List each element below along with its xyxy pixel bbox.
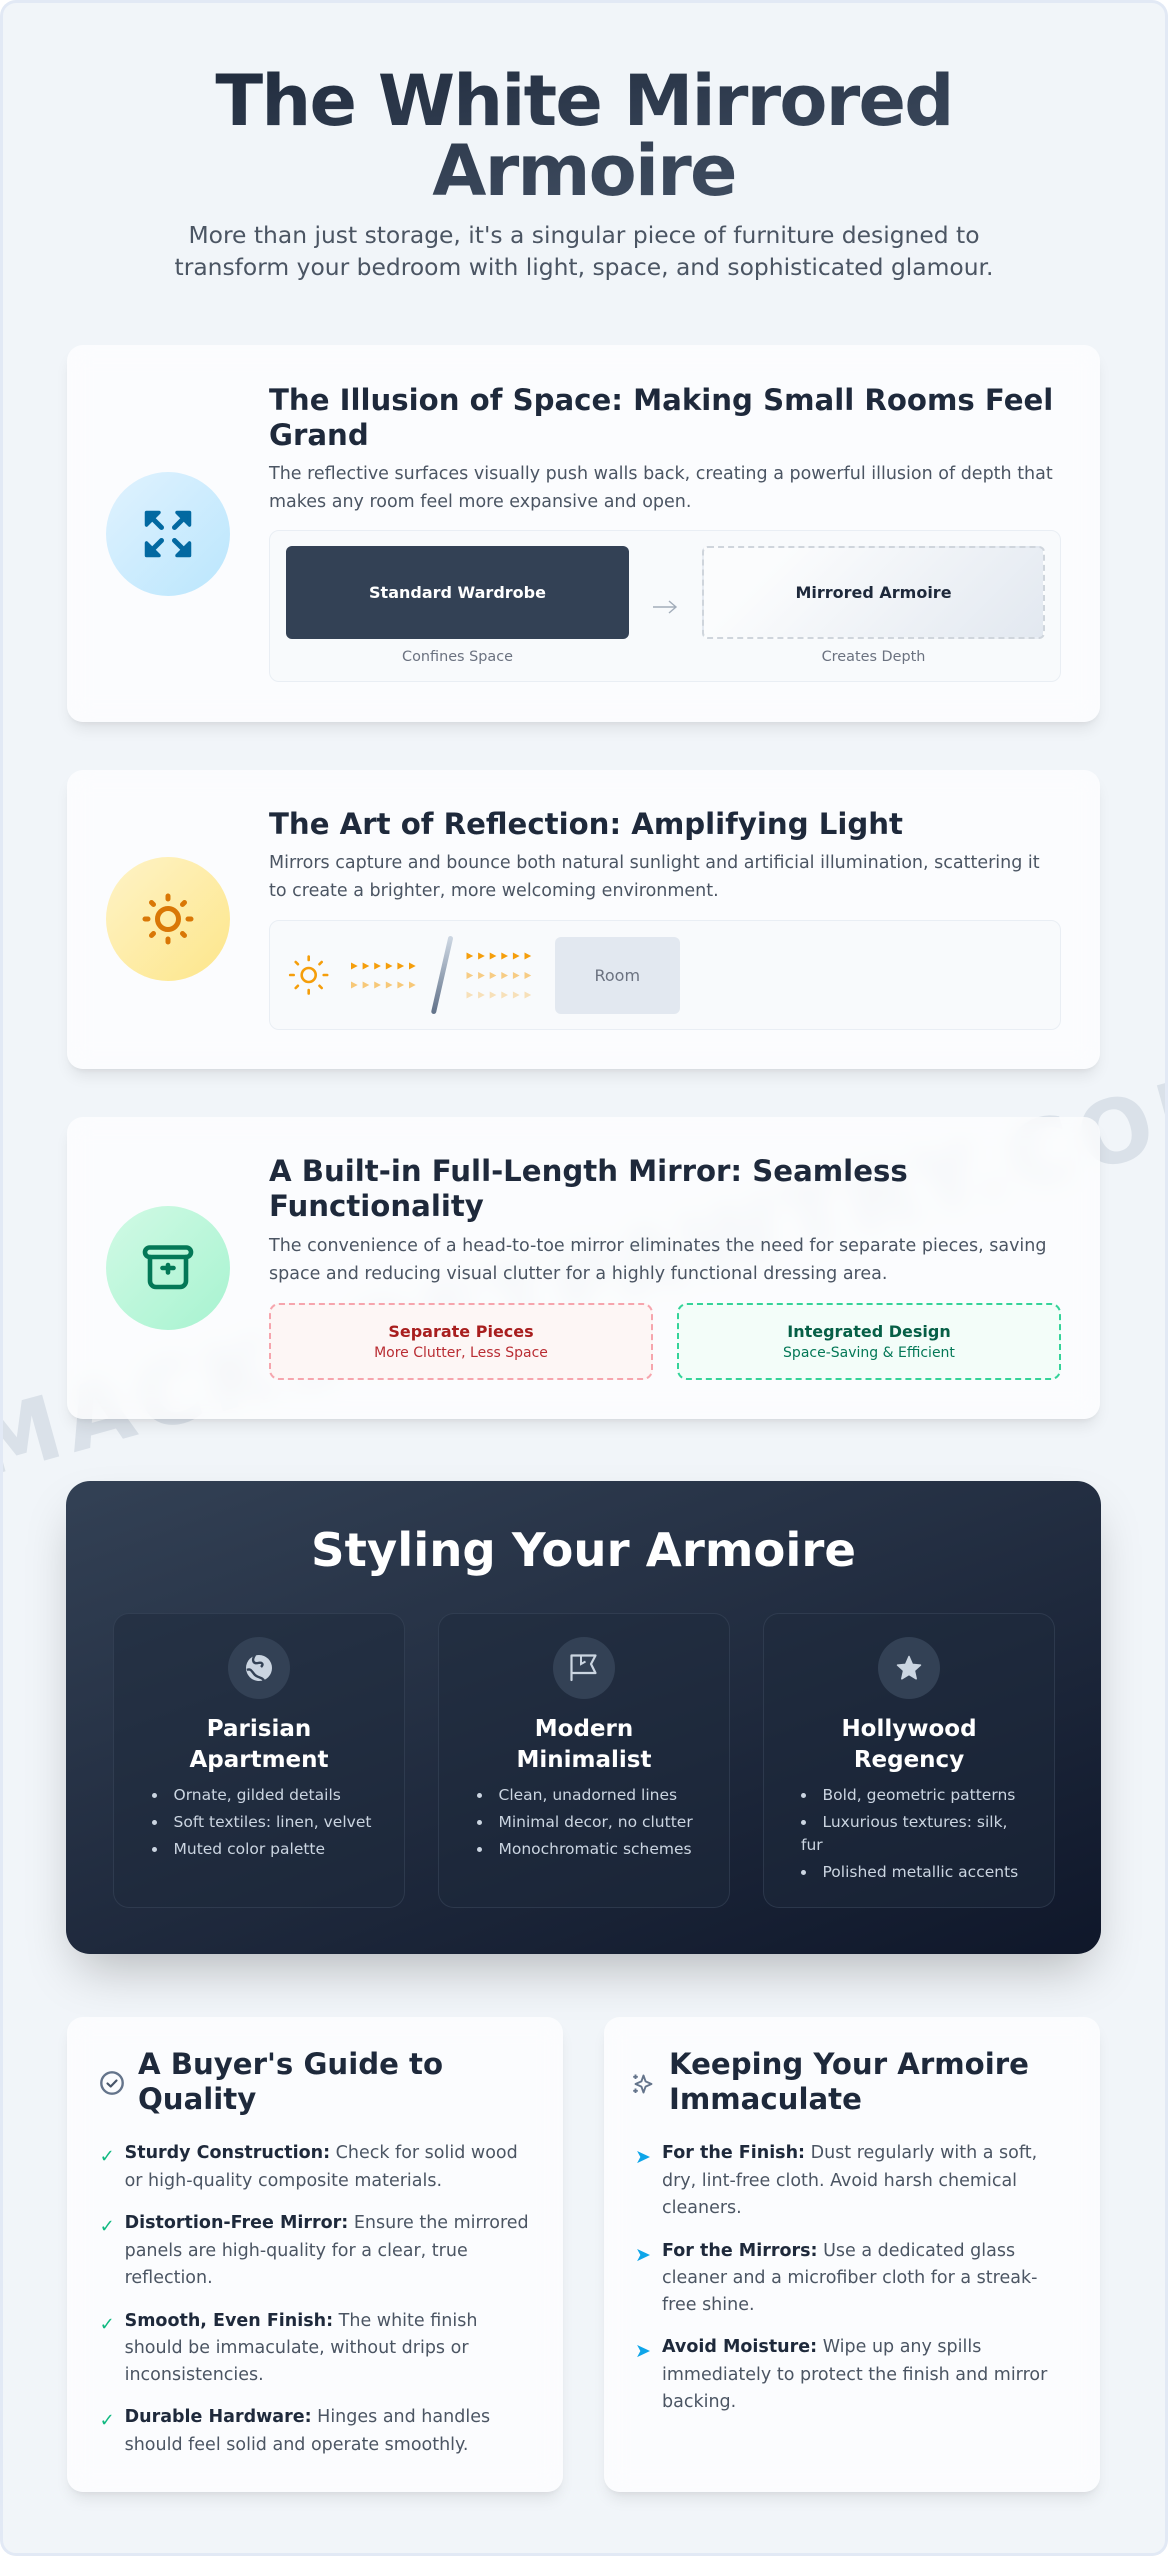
item: smooth finish [100,2311,477,2385]
heading: Functionality [269,1189,484,1223]
subtitle: More than just storage, it's a singular piece of furniture designed to [188,221,980,249]
description [268,464,1053,512]
icon: sun [106,857,230,981]
icon: flag [553,1637,615,1699]
heading [669,2047,1029,2116]
style name: Minimalist [517,1747,651,1773]
style name: Regency [854,1747,964,1773]
panel: art of reflection [67,770,1100,1069]
item: the mirrors [635,2241,1037,2315]
panel: keeping immaculate [604,2017,1100,2492]
item: distortion-free mirror: reflection. [125,2268,213,2288]
panel: styling your armoire [66,1481,1101,1954]
panel: keeping immaculate: ➤ [635,2340,651,2362]
style card: hollywood regency [763,1613,1055,1908]
description: Mirrors capture and bounce both natural sunlight and artificial illumination, scattering it [269,853,1040,873]
item: the finish: For the Finish: Dust regularly with a soft, [662,2143,1037,2163]
style list: Polished metallic accents [822,1863,1018,1881]
item: the finish: dry, lint-free cloth. Avoid harsh chemical [662,2171,1017,2191]
description: space and reducing visual clutter for a highly functional dressing area. [269,1264,887,1284]
light rays and mirror [288,936,532,1014]
item: durable hardware: Durable Hardware: Hinges and handles [125,2407,490,2427]
panel: illusion of space [67,345,1100,722]
heading: The Illusion of Space: Making Small Rooms Feel [269,383,1053,417]
style name: Parisian [207,1716,311,1742]
item: the finish [635,2143,1037,2218]
style name: Hollywood [841,1716,977,1742]
panel: buyer's guide: ✓ [100,2410,115,2431]
heading: Grand [269,418,369,452]
style name [841,1716,977,1773]
item: avoid moisture: Avoid Moisture: Wipe up any spills [662,2337,981,2357]
item: distortion-free mirror: Distortion-Free Mirror: Ensure the mirrored [125,2213,529,2233]
item: the mirrors: For the Mirrors: Use a dedicated glass [662,2241,1015,2261]
item: smooth finish: Smooth, Even Finish: The white finish [125,2311,477,2331]
icon: archive box [106,1206,230,1330]
sublabel: Space-Saving & Efficient [783,1344,955,1360]
item: smooth finish: should be immaculate, without drips or [125,2338,469,2358]
label: creates depth: Creates Depth [822,649,925,665]
style list: Ornate, gilded details [174,1786,341,1804]
description: The reflective surfaces visually push walls back, creating a powerful illusion of depth that [269,464,1053,484]
style list: Luxurious textures: silk, [822,1813,1007,1831]
standard wardrobe block [286,546,629,639]
style list [152,1786,372,1858]
item: the mirrors: cleaner and a microfiber cloth for a streak- [662,2268,1037,2288]
item: the finish: cleaners. [662,2198,742,2218]
panel: buyer's guide [67,2017,563,2492]
style list: Clean, unadorned lines [498,1786,677,1804]
item: avoid moisture: immediately to protect the finish and mirror [662,2365,1047,2385]
icon: globe [228,1637,290,1699]
heading [269,1154,908,1223]
style name: Modern [535,1716,633,1742]
subtitle [175,221,993,280]
title: Armoire [432,130,736,212]
heading [269,383,1053,452]
style name: Apartment [189,1747,329,1773]
item: sturdy construction: or high-quality composite materials. [125,2171,442,2191]
style list [801,1786,1018,1881]
title: The White Mirrored [215,60,953,142]
diagram: wardrobe versus armoire [269,530,1061,682]
icon: sparkles [633,2074,652,2094]
comparison: separate pieces [269,1303,653,1380]
standard wardrobe block: Standard Wardrobe [369,583,546,602]
description: The convenience of a head-to-toe mirror eliminates the need for separate pieces, saving [269,1236,1046,1256]
heading: A Buyer's Guide to [138,2047,443,2081]
diagram: light reflection [269,920,1061,1030]
label: Integrated Design [787,1322,951,1341]
subtitle: transform your bedroom with light, space, and sophisticated glamour. [175,252,993,280]
style name [189,1716,329,1773]
mirrored armoire block [702,546,1045,639]
item: sturdy construction [100,2143,518,2191]
panel: keeping immaculate: ➤ [635,2146,651,2168]
item: the mirrors: free shine. [662,2295,755,2315]
description [268,1236,1046,1284]
heading: Immaculate [669,2082,862,2116]
label: confines space: Confines Space [402,649,513,665]
style card: modern minimalist [438,1613,730,1908]
sublabel: More Clutter, Less Space [374,1344,548,1360]
title [100,66,1068,206]
style name [517,1716,651,1773]
style list: fur [801,1836,823,1854]
style list [477,1786,693,1858]
style list: Bold, geometric patterns [822,1786,1015,1804]
item: distortion-free mirror: panels are high-quality for a clear, true [125,2241,468,2261]
heading: Styling Your Armoire [311,1523,856,1577]
comparison: integrated design [677,1303,1061,1380]
heading: A Built-in Full-Length Mirror: Seamless [269,1154,908,1188]
item: smooth finish: inconsistencies. [125,2365,264,2385]
panel: buyer's guide: ✓ [100,2314,115,2335]
panel: built-in mirror [67,1117,1100,1419]
item: durable hardware [100,2407,490,2455]
description [269,853,1040,901]
icon: check circle [100,2071,124,2095]
mirrored armoire block: Mirrored Armoire [795,583,952,602]
style card: parisian apartment [113,1613,405,1908]
panel: buyer's guide: ✓ [100,2216,115,2237]
item: avoid moisture [635,2337,1048,2412]
style list: Muted color palette [174,1840,325,1858]
heading [138,2047,443,2116]
icon: expand arrows [106,472,230,596]
label: Separate Pieces [388,1322,534,1341]
style list: Minimal decor, no clutter [498,1813,693,1831]
room block [555,936,680,1014]
icon: star [878,1637,940,1699]
panel: buyer's guide: ✓ [100,2146,115,2167]
item: sturdy construction: Sturdy Construction: Check for solid wood [125,2143,518,2163]
item: avoid moisture: backing. [662,2392,736,2412]
item: durable hardware: should feel solid and operate smoothly. [125,2435,468,2455]
arrow [653,600,677,614]
heading: The Art of Reflection: Amplifying Light [269,807,903,841]
item: distortion-free mirror [100,2213,529,2288]
style list: Monochromatic schemes [498,1840,692,1858]
heading: Keeping Your Armoire [669,2047,1029,2081]
heading: Quality [138,2082,256,2116]
room block: Room [594,966,640,984]
description: makes any room feel more expansive and open. [269,492,691,512]
style list: Soft textiles: linen, velvet [174,1813,371,1831]
description: to create a brighter, more welcoming environment. [269,881,719,901]
panel: keeping immaculate: ➤ [635,2244,651,2266]
